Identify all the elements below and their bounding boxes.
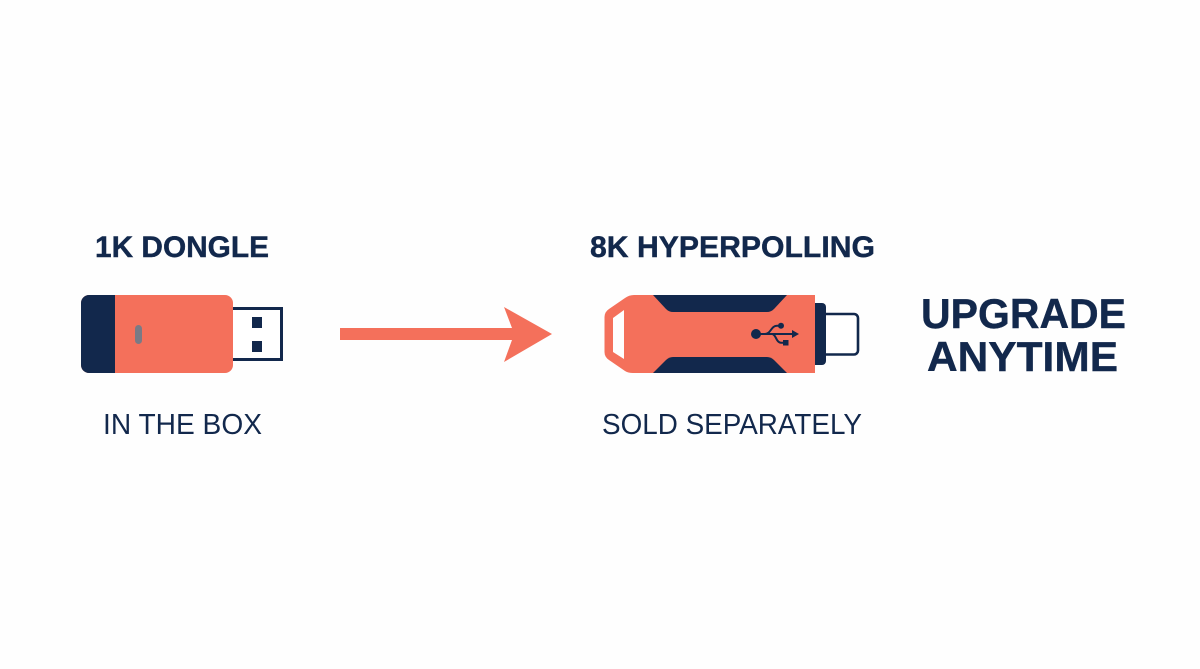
- icon: 8K USB dongle: [604, 295, 858, 373]
- callout: upgrade anytime: [921, 290, 1126, 380]
- dongle connector: [231, 308, 282, 360]
- callout: upgrade anytime: UPGRADE: [921, 290, 1126, 337]
- heading: 1K dongle: 1K DONGLE: [95, 231, 269, 264]
- connector plug: [822, 314, 858, 354]
- heading: 8K hyperpolling: 8K HYPERPOLLING: [590, 231, 875, 264]
- caption: sold separately: SOLD SEPARATELY: [602, 409, 862, 441]
- bottom grip: [653, 357, 787, 373]
- connector collar: [815, 303, 826, 365]
- caption: in the box: IN THE BOX: [103, 409, 262, 441]
- callout: upgrade anytime: ANYTIME: [927, 333, 1118, 380]
- icon: 1K USB dongle: [81, 295, 282, 373]
- dongle navy end cap: [81, 295, 115, 373]
- dongle body with lanyard loop: [604, 295, 815, 373]
- dongle body: [81, 295, 233, 373]
- icon: USB symbol: [751, 323, 799, 346]
- top grip: [653, 295, 787, 312]
- dongle LED: [135, 325, 142, 344]
- arrow: [340, 307, 552, 362]
